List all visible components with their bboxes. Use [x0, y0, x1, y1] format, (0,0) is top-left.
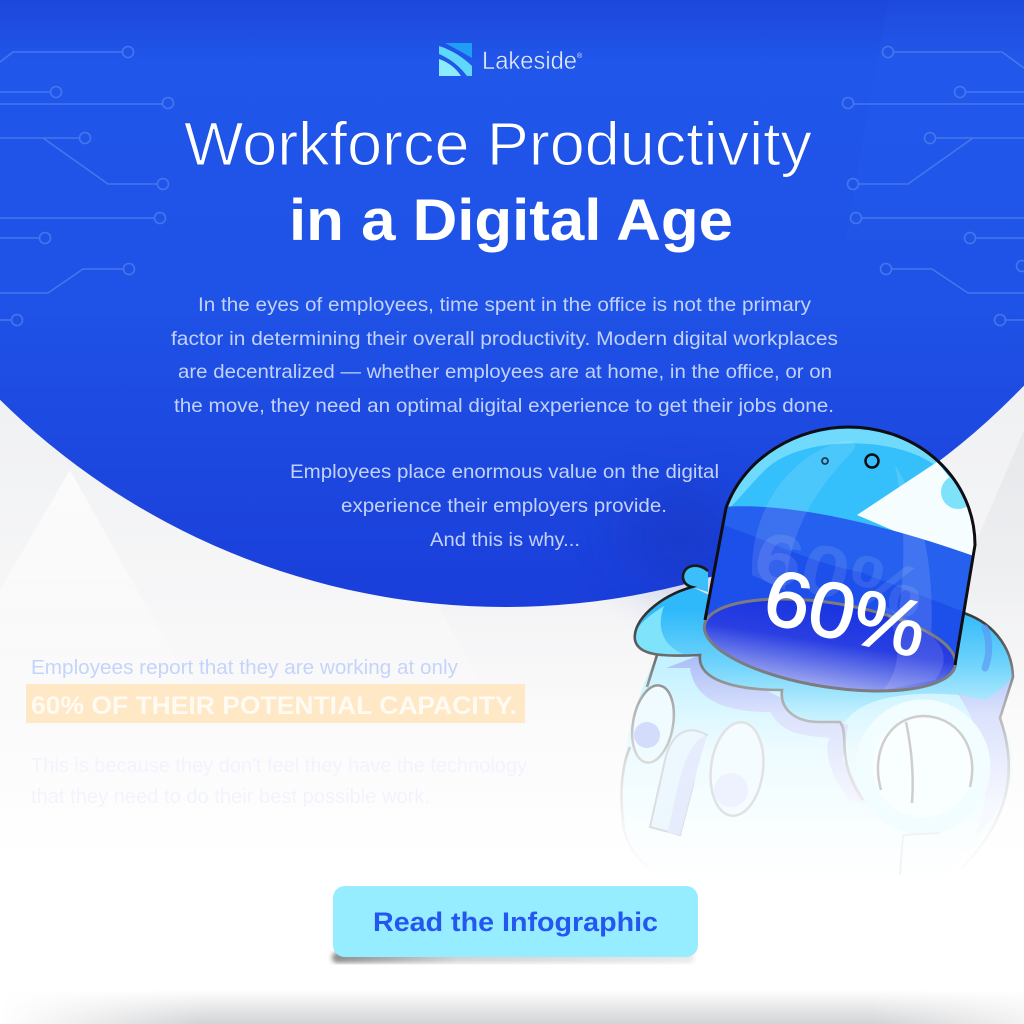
logo: Lakeside	[439, 43, 583, 76]
finger left	[627, 682, 679, 766]
brain cloud	[635, 587, 1013, 722]
dial arc	[878, 716, 972, 803]
brain lobe shadow	[666, 655, 868, 805]
title	[184, 110, 813, 253]
title line 2: in a Digital Age	[289, 188, 733, 253]
finger middle	[650, 730, 707, 835]
intro paragraph: are decentralized — whether employees are at home, in the office, or on	[178, 361, 832, 383]
faded body text: This is because they don't feel they have the technology	[31, 754, 528, 777]
call-to-action button	[332, 886, 698, 963]
head silhouette	[622, 620, 1013, 900]
intro paragraph	[171, 294, 838, 417]
hand tip	[683, 566, 708, 592]
illustration: brain with 60% glass dome	[622, 425, 1013, 900]
highlight bar	[26, 684, 525, 723]
brain outline	[622, 566, 1013, 892]
capacity lead-in: Employees report that they are working at only	[31, 656, 459, 679]
icon: logo mark	[439, 43, 472, 76]
logo wordmark: Lakeside	[482, 47, 577, 75]
secondary paragraph	[290, 461, 719, 551]
button shadow	[332, 952, 694, 963]
button face	[333, 886, 698, 957]
intro paragraph: In the eyes of employees, time spent in the office is not the primary	[198, 294, 811, 316]
hand crescent highlight	[635, 606, 690, 656]
dome eye large	[866, 454, 878, 468]
dome eye small	[822, 458, 828, 464]
dial ring	[864, 708, 982, 826]
panel: blue header circle	[0, 0, 1024, 607]
dome base ellipse	[698, 584, 962, 706]
highlighted statement: 60% OF THEIR POTENTIAL CAPACITY.	[31, 692, 517, 720]
faint background facets	[0, 430, 1024, 720]
ghost 60% reflection: 60%	[746, 516, 932, 635]
intro paragraph: the move, they need an optimal digital experience to get their jobs done.	[174, 395, 834, 417]
dome outline	[705, 427, 975, 665]
registered mark: ®	[577, 52, 583, 60]
glass dome	[698, 425, 985, 706]
circuit lines right	[842, 46, 1024, 326]
right lobe shade	[955, 610, 1013, 835]
60% label: 60%	[756, 552, 935, 674]
faded body text: that they need to do their best possible work.	[31, 785, 430, 808]
circuit lines left	[0, 46, 174, 326]
finger right	[705, 719, 769, 819]
title line 1: Workforce Productivity	[184, 110, 813, 178]
neck outline	[900, 833, 940, 875]
right brain detail	[985, 628, 989, 668]
capacity text block	[26, 656, 528, 808]
secondary paragraph: Employees place enormous value on the digital	[290, 461, 719, 483]
intro paragraph: factor in determining their overall productivity. Modern digital workplaces	[171, 328, 838, 350]
secondary paragraph: experience their employers provide.	[341, 495, 667, 517]
floor shadow band	[0, 990, 1024, 1024]
button label: Read the Infographic	[373, 907, 658, 937]
faded body text	[31, 754, 528, 808]
secondary paragraph: And this is why...	[430, 529, 580, 551]
